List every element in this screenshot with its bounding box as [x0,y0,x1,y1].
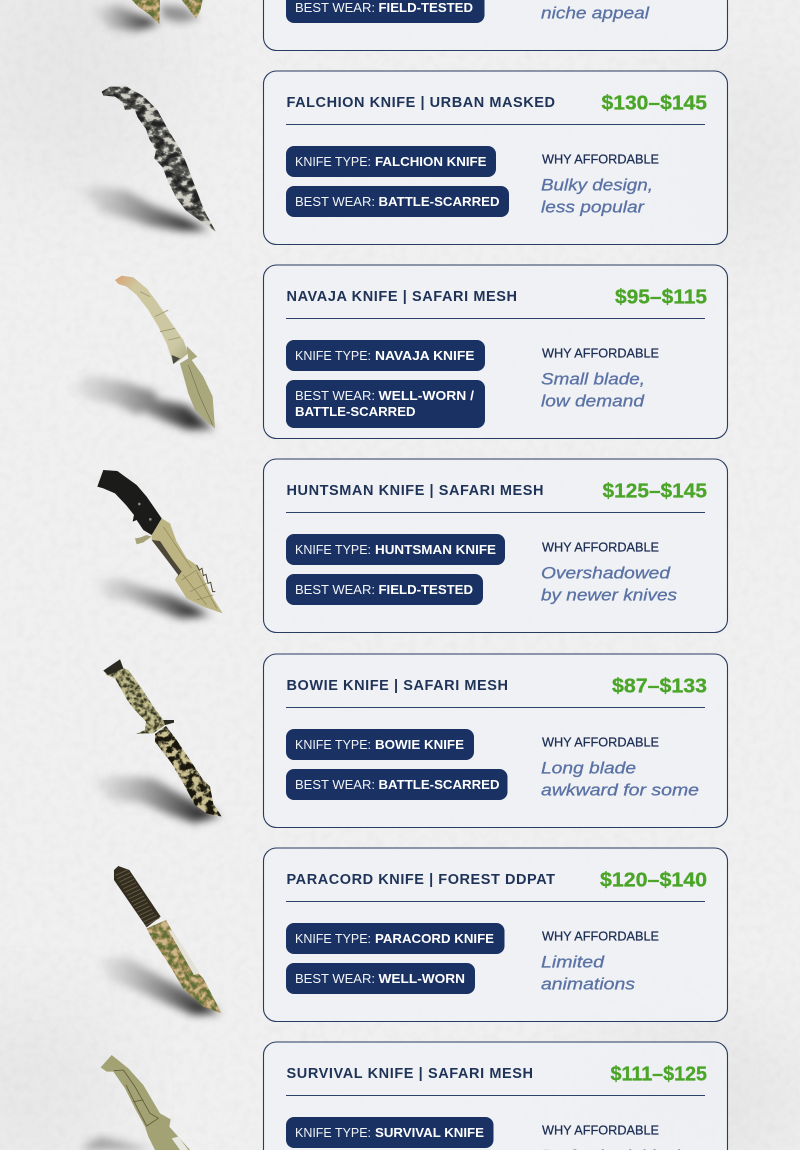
knife image: navaja safari mesh [72,276,215,429]
pill: best wear [286,963,475,994]
reason text: Limited [541,952,605,972]
price range: $111–$125 [610,1064,707,1086]
pill: best wear: BEST WEAR: [295,777,375,792]
pill: best wear [286,380,485,428]
pill: best wear: BATTLE-SCARRED [378,777,500,792]
knife image: falchion urban masked [75,87,216,231]
reason text: awkward for some [541,780,699,800]
price range: $130–$145 [602,92,707,114]
reason text: Small blade, [541,370,645,388]
pill: knife type: BOWIE KNIFE [375,737,464,752]
price range: $125–$145 [602,480,707,502]
reason text: Long blade [541,758,636,778]
panel: paracord knife [264,848,728,1022]
pill: knife type [286,1117,494,1148]
price range: $95–$115 [615,286,707,308]
price range: $120–$140 [600,870,707,892]
pill: best wear: BEST WEAR: [295,388,375,403]
panel: top knife partial card [264,0,728,50]
pill: best wear: WELL-WORN [378,971,465,986]
reason text: animations [541,974,636,994]
why affordable label: WHY AFFORDABLE [542,540,659,554]
pill: knife type: KNIFE TYPE: [295,348,371,363]
price range: $87–$133 [612,676,707,698]
reason text: Bulky design, [541,176,653,194]
pill: knife type [286,340,485,371]
knife image: survival safari mesh partial [83,1055,190,1150]
knife image: bowie safari mesh [92,659,222,823]
pill: knife type [286,146,496,177]
pill: best wear field-tested: FIELD-TESTED [378,0,473,15]
reason text: by newer knives [541,586,678,604]
reason text [541,370,645,410]
panel: falchion knife [264,71,728,244]
pill: best wear [286,186,509,217]
pill: knife type: KNIFE TYPE: [295,154,371,169]
pill: best wear: BEST WEAR: [295,971,375,986]
panel: huntsman knife [264,459,728,632]
pill: knife type: SURVIVAL KNIFE [375,1125,484,1140]
reason text: Overshadowed [541,564,671,582]
card title: PARACORD KNIFE | FOREST DDPAT [286,872,555,888]
card title: NAVAJA KNIFE | SAFARI MESH [286,289,517,305]
pill: knife type: KNIFE TYPE: [295,931,371,946]
why affordable label: WHY AFFORDABLE [542,1124,659,1138]
pill: knife type: HUNTSMAN KNIFE [375,542,496,557]
pill: knife type [286,729,474,760]
pill: best wear: BATTLE-SCARRED [295,404,416,419]
knife image: huntsman safari mesh [95,470,223,618]
reason text: low demand [541,392,645,410]
panel: navaja knife [264,265,728,438]
why affordable label: WHY AFFORDABLE [542,152,659,166]
pill: knife type: NAVAJA KNIFE [375,348,475,363]
pill: knife type [286,534,505,565]
pill: best wear: BEST WEAR: [295,194,375,209]
pill: knife type: KNIFE TYPE: [295,737,371,752]
panel: survival knife [264,1042,728,1150]
card title: FALCHION KNIFE | URBAN MASKED [286,95,555,111]
pill: best wear field-tested: BEST WEAR: [295,0,375,15]
why affordable label: WHY AFFORDABLE [542,736,659,750]
pill: best wear [286,574,483,605]
reason text [541,564,678,604]
pill: knife type: KNIFE TYPE: [295,542,371,557]
pill: knife type: PARACORD KNIFE [375,931,494,946]
pill: best wear [286,769,508,800]
reason text [541,176,653,216]
pill: knife type: KNIFE TYPE: [295,1125,371,1140]
card title: HUNTSMAN KNIFE | SAFARI MESH [286,483,544,499]
card title: BOWIE KNIFE | SAFARI MESH [286,678,508,694]
pill: best wear: BATTLE-SCARRED [378,194,500,209]
pill: best wear: FIELD-TESTED [378,582,473,597]
knife image: partial top knife pair [92,0,203,31]
why affordable label: WHY AFFORDABLE [542,930,659,944]
reason text: niche appeal [541,4,650,23]
why affordable label: WHY AFFORDABLE [542,346,659,360]
reason text: less popular [541,198,645,216]
reason text [541,758,699,800]
panel: bowie knife [264,654,728,828]
reason text [541,952,636,994]
pill: knife type: FALCHION KNIFE [375,154,487,169]
card title: SURVIVAL KNIFE | SAFARI MESH [286,1066,533,1082]
pill: knife type [286,923,504,954]
pill: best wear field-tested [286,0,484,23]
pill: best wear: WELL-WORN / [378,388,474,403]
pill: best wear: BEST WEAR: [295,582,375,597]
knife image: paracord forest ddpat [98,866,222,1015]
